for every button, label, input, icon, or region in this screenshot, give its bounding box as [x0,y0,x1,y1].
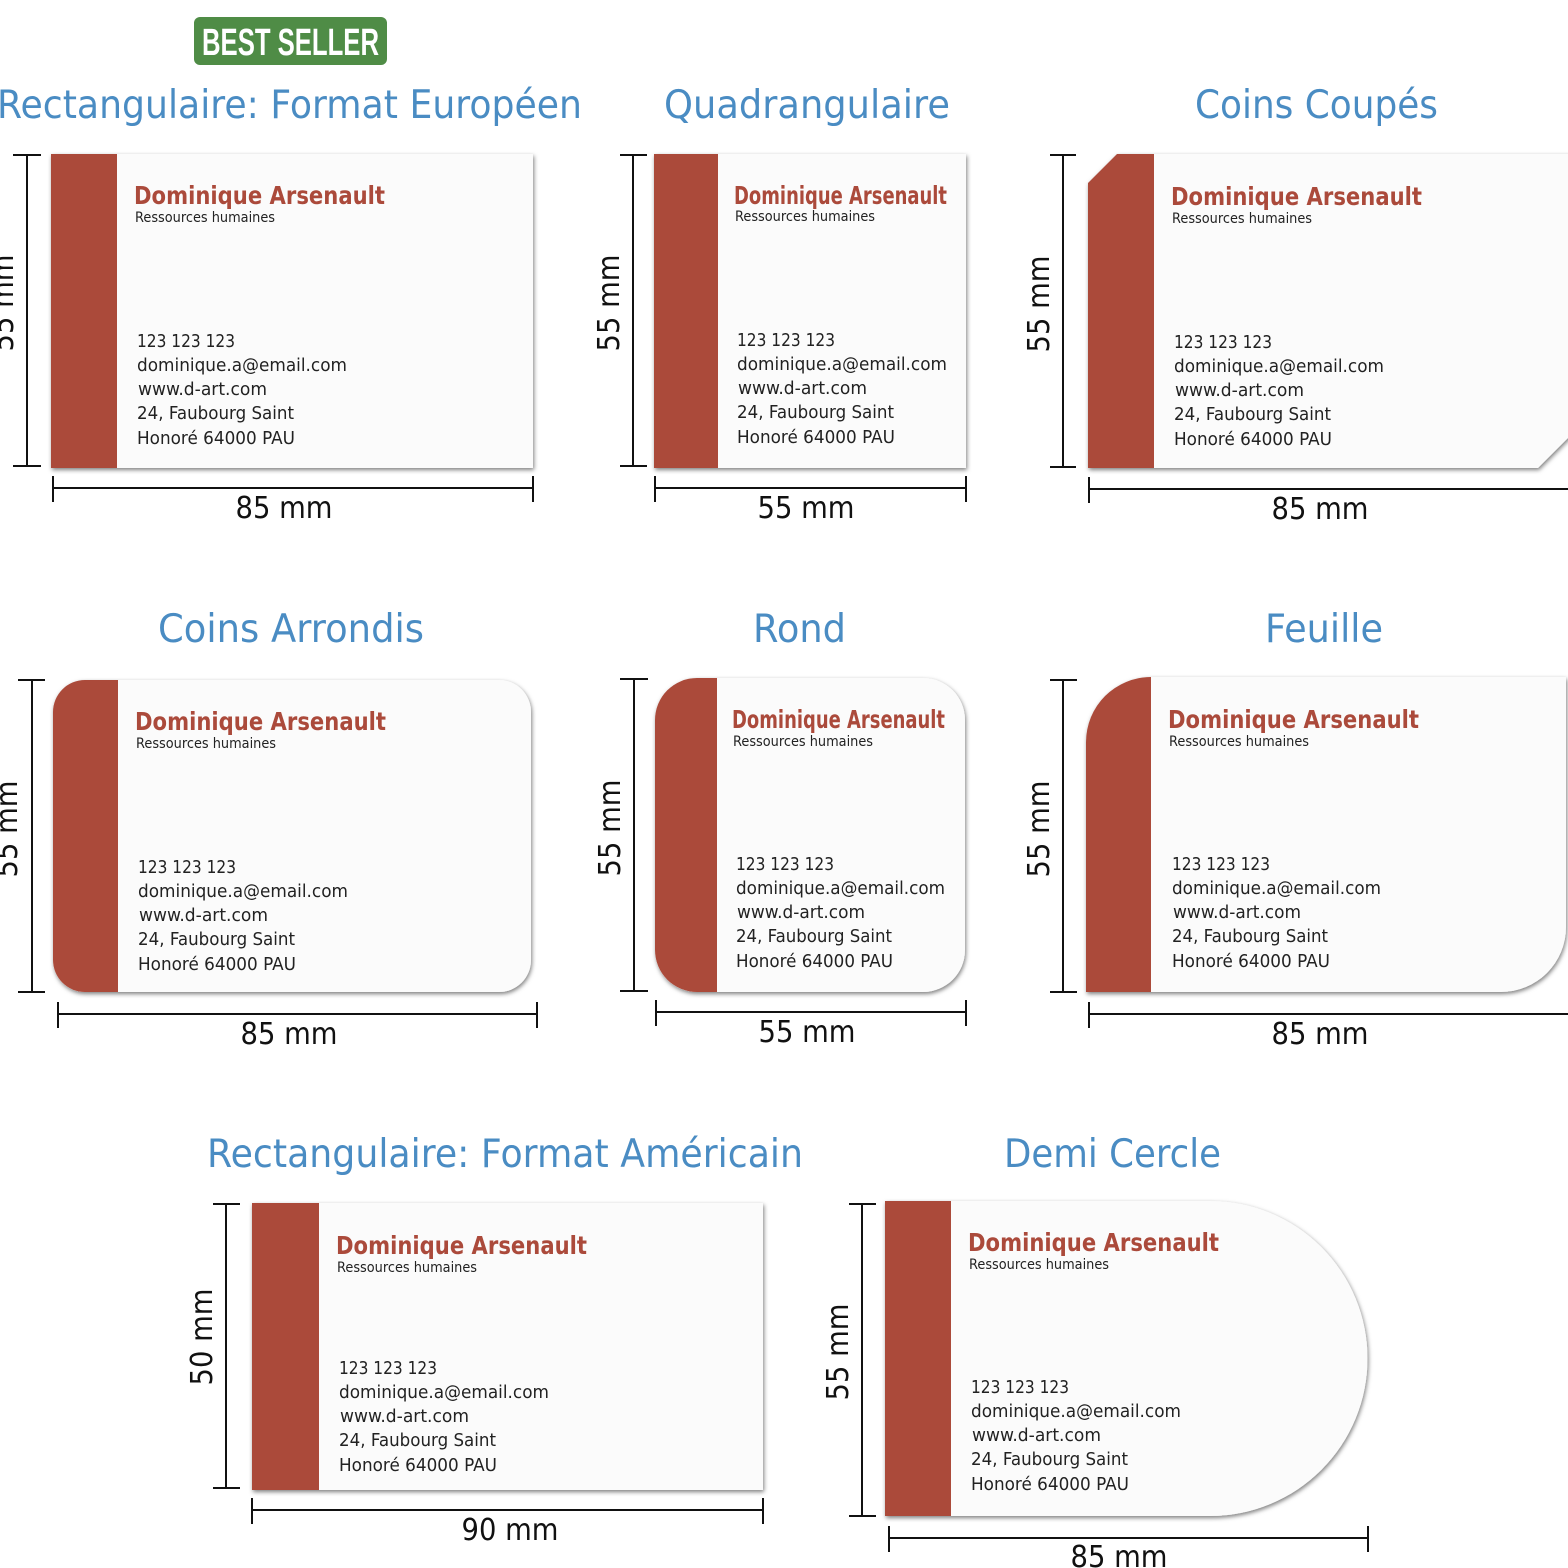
card contact details [736,855,945,972]
card contact details: www.d-art.com [340,1407,469,1427]
heading: Rectangulaire Format Européen: Rectangulaire: Format Européen [0,83,582,128]
dimension: width 85 mm [1089,477,1568,527]
card contact details: Honoré 64000 PAU [736,952,893,972]
card contact details: dominique.a@email.com [339,1383,549,1403]
dimension: height 55 mm [1022,680,1077,992]
card contact details: www.d-art.com [1175,381,1304,401]
card contact details [137,332,347,449]
card contact details [339,1359,549,1476]
card shape [252,1203,763,1490]
card contact details: www.d-art.com [737,903,865,923]
dimension: height 55 mm [1022,155,1076,467]
card name and role: Ressources humaines [1172,211,1312,227]
card name and role: Ressources humaines [735,209,875,225]
heading: Coins Arrondis: Coins Arrondis [158,607,424,652]
card contact details [1174,333,1384,450]
panel: card square [654,154,966,468]
card shape [53,680,531,992]
card contact details: 24, Faubourg Saint [138,930,295,950]
card contact details: Honoré 64000 PAU [1172,952,1330,972]
card contact details [737,331,947,448]
card contact details: dominique.a@email.com [971,1402,1181,1422]
card contact details [138,858,348,975]
card contact details: www.d-art.com [738,379,867,399]
heading: Demi Cercle: Demi Cercle [1004,1132,1221,1177]
card shape [885,1201,1368,1516]
card contact details: dominique.a@email.com [1174,357,1384,377]
card contact details: 123 123 123 [339,1359,437,1379]
colour band [885,1201,951,1516]
colour band [53,680,118,992]
card contact details: dominique.a@email.com [137,356,347,376]
card name and role: Ressources humaines [733,734,873,750]
card name and role: Ressources humaines [1169,734,1309,750]
card name and role: Dominique Arsenault [1168,705,1419,734]
dimension: width 85 mm: 85 mm [240,1017,338,1052]
card contact details: 24, Faubourg Saint [736,927,892,947]
card name and role: Ressources humaines [135,210,275,226]
card contact details: www.d-art.com [139,906,268,926]
dimension: height 55 mm: 55 mm [821,1304,856,1400]
card contact details: www.d-art.com [1173,903,1301,923]
card shape [1086,677,1566,992]
card name and role: Ressources humaines [337,1260,477,1276]
card contact details [1172,855,1381,972]
card contact details: Honoré 64000 PAU [137,429,295,449]
heading: Coins Coupés: Coins Coupés [1195,83,1438,128]
card name and role: Ressources humaines [136,736,276,752]
card name and role [1171,182,1422,227]
dimension: width 90 mm [252,1498,763,1548]
panel: card cut corners [1088,154,1568,468]
panel: card leaf [1086,677,1566,992]
card contact details: 24, Faubourg Saint [1174,405,1331,425]
card contact details: 24, Faubourg Saint [137,404,294,424]
card name and role: Dominique Arsenault [732,705,945,734]
card contact details: www.d-art.com [138,380,267,400]
dimension: height 55 mm [593,679,648,991]
dimension: width 85 mm [1089,1002,1568,1052]
dimension: height 50 mm [185,1204,240,1488]
heading: Feuille: Feuille [1265,607,1383,652]
panel: card rounded corners [53,680,531,992]
dimension: height 55 mm [821,1204,876,1516]
card contact details: dominique.a@email.com [138,882,348,902]
dimension: height 55 mm [0,680,45,992]
colour band [655,678,717,992]
card contact details: dominique.a@email.com [736,879,945,899]
heading: Rond: Rond [753,607,846,652]
card shape [654,154,966,468]
dimension: height 55 mm: 55 mm [1022,256,1057,352]
dimension: width 85 mm [53,476,533,526]
badge: best seller: BEST SELLER [202,22,379,64]
card contact details: Honoré 64000 PAU [339,1456,497,1476]
dimension: width 85 mm: 85 mm [1272,492,1368,527]
dimension: height 50 mm: 50 mm [185,1288,220,1386]
card contact details: 123 123 123 [138,858,236,878]
card contact details: 123 123 123 [736,855,834,875]
colour band [1086,677,1151,992]
card contact details: Honoré 64000 PAU [737,428,895,448]
card name and role [336,1231,587,1276]
dimension: height 55 mm [0,155,41,466]
colour band [51,154,117,468]
dimension: height 55 mm: 55 mm [592,254,627,352]
card name and role [135,707,386,752]
card name and role: Dominique Arsenault [734,181,947,210]
card name and role [968,1228,1219,1273]
card name and role [1168,705,1419,750]
badge: best seller [194,17,387,65]
card shape [655,678,965,992]
card contact details: Honoré 64000 PAU [971,1475,1129,1495]
panel: card European rectangle [51,154,533,468]
card name and role [734,181,947,225]
card name and role [732,705,945,750]
card contact details: www.d-art.com [972,1426,1101,1446]
colour band [1088,154,1154,468]
dimension: width 55 mm: 55 mm [758,491,854,526]
card contact details: 24, Faubourg Saint [971,1450,1128,1470]
dimension: width 85 mm: 85 mm [236,491,332,526]
dimension: height 55 mm: 55 mm [593,780,628,876]
colour band [252,1203,319,1490]
colour band [654,154,718,468]
card contact details: 24, Faubourg Saint [1172,927,1328,947]
card contact details: dominique.a@email.com [737,355,947,375]
card contact details: Honoré 64000 PAU [138,955,296,975]
heading: Rectangulaire Format Américain: Rectangulaire: Format Américain [207,1132,803,1177]
card contact details: dominique.a@email.com [1172,879,1381,899]
card contact details: 123 123 123 [1172,855,1270,875]
dimension: width 85 mm [58,1002,537,1052]
dimension: width 90 mm: 90 mm [462,1513,558,1548]
card contact details: 123 123 123 [137,332,235,352]
dimension: width 85 mm: 85 mm [1272,1017,1368,1052]
card shape [51,154,533,468]
dimension: width 55 mm [655,476,966,526]
card name and role: Dominique Arsenault [968,1228,1219,1257]
card name and role: Dominique Arsenault [336,1231,587,1260]
card contact details: 24, Faubourg Saint [339,1431,496,1451]
card contact details: 123 123 123 [737,331,835,351]
card shape [1088,154,1568,468]
dimension: width 55 mm [656,1000,966,1050]
card contact details: 123 123 123 [1174,333,1272,353]
panel: card American rectangle [252,1203,763,1490]
card name and role: Dominique Arsenault [134,181,385,210]
panel: card half circle [885,1201,1368,1516]
dimension: width 55 mm: 55 mm [758,1015,856,1050]
heading: Quadrangulaire: Quadrangulaire [664,83,950,128]
dimension: height 55 mm: 55 mm [1022,780,1057,878]
card name and role: Ressources humaines [969,1257,1109,1273]
dimension: width 85 mm [889,1526,1368,1568]
card contact details: Honoré 64000 PAU [1174,430,1332,450]
card contact details [971,1378,1181,1495]
card name and role: Dominique Arsenault [135,707,386,736]
card name and role: Dominique Arsenault [1171,182,1422,211]
panel: card round [655,678,965,992]
dimension: height 55 mm [592,155,647,466]
card contact details: 24, Faubourg Saint [737,403,894,423]
card contact details: 123 123 123 [971,1378,1069,1398]
card name and role [134,181,385,226]
